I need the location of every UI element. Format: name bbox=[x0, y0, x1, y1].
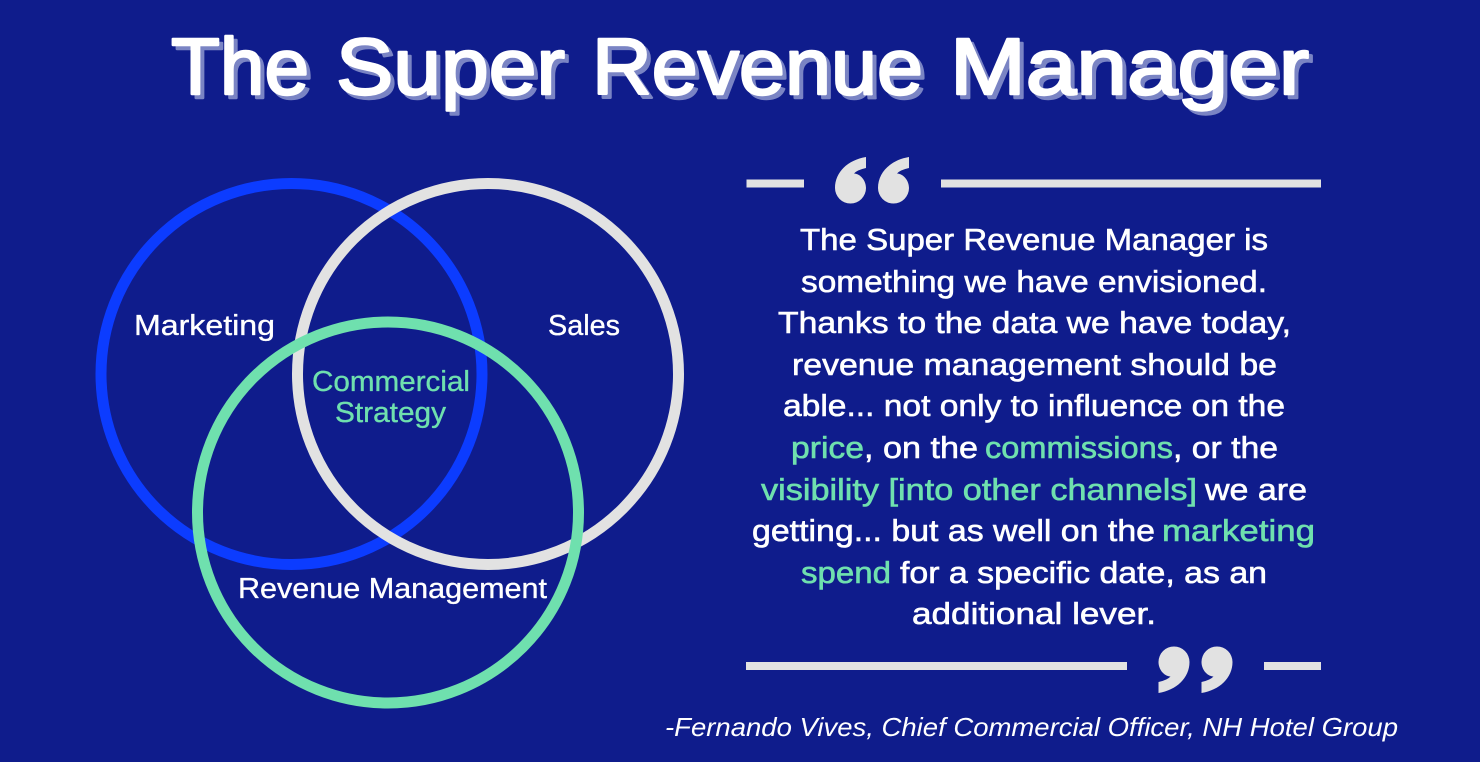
label: sales: Sales bbox=[548, 310, 620, 342]
quote text: we are bbox=[1204, 472, 1307, 507]
quote text: price bbox=[791, 430, 864, 465]
quote text: visibility [into other channels] bbox=[761, 472, 1197, 507]
title: The bbox=[171, 22, 309, 111]
title: Revenue bbox=[596, 26, 927, 115]
title: Super bbox=[336, 22, 565, 111]
attribution: -Fernando Vives, Chief Commercial Officer, NH Hotel Group bbox=[665, 712, 1398, 742]
label: commercial strategy: Strategy bbox=[335, 397, 447, 429]
quote text bbox=[752, 222, 1315, 631]
quote text: , on the bbox=[864, 430, 978, 465]
label: marketing: Marketing bbox=[134, 310, 275, 342]
quote text: , or the bbox=[1173, 430, 1278, 465]
venn diagram bbox=[101, 184, 678, 703]
circle: revenue management bbox=[198, 322, 578, 703]
quote text: commissions bbox=[985, 430, 1173, 465]
icon: opening quotation mark bbox=[835, 157, 909, 204]
label: commercial strategy: Commercial bbox=[312, 366, 470, 398]
icon: closing quotation mark bbox=[1158, 646, 1232, 693]
title: Super bbox=[340, 26, 569, 115]
quote text: Thanks to the data we have today, bbox=[778, 305, 1291, 340]
title: Revenue bbox=[592, 22, 923, 111]
title: The bbox=[175, 26, 313, 115]
quote text: marketing bbox=[1162, 513, 1315, 548]
quote text: getting... but as well on the bbox=[752, 513, 1155, 548]
quote rule: top bbox=[746, 180, 1321, 188]
quote rule: bottom bbox=[746, 662, 1321, 670]
quote text: spend bbox=[801, 555, 891, 590]
quote text: for a specific date, as an bbox=[900, 555, 1267, 590]
quote text: something we have envisioned. bbox=[801, 264, 1267, 299]
title bbox=[171, 22, 1313, 115]
quote text: The Super Revenue Manager is bbox=[800, 222, 1268, 257]
label: commercial strategy bbox=[312, 366, 470, 429]
title: Manager bbox=[950, 22, 1309, 111]
quote text: revenue management should be bbox=[792, 347, 1277, 382]
circle: marketing bbox=[101, 184, 482, 564]
title: Manager bbox=[954, 26, 1313, 115]
quote text: able... not only to influence on the bbox=[783, 388, 1285, 423]
circle: sales bbox=[298, 184, 678, 564]
label: revenue management: Revenue Management bbox=[238, 573, 547, 605]
quote text: additional lever. bbox=[912, 596, 1156, 631]
